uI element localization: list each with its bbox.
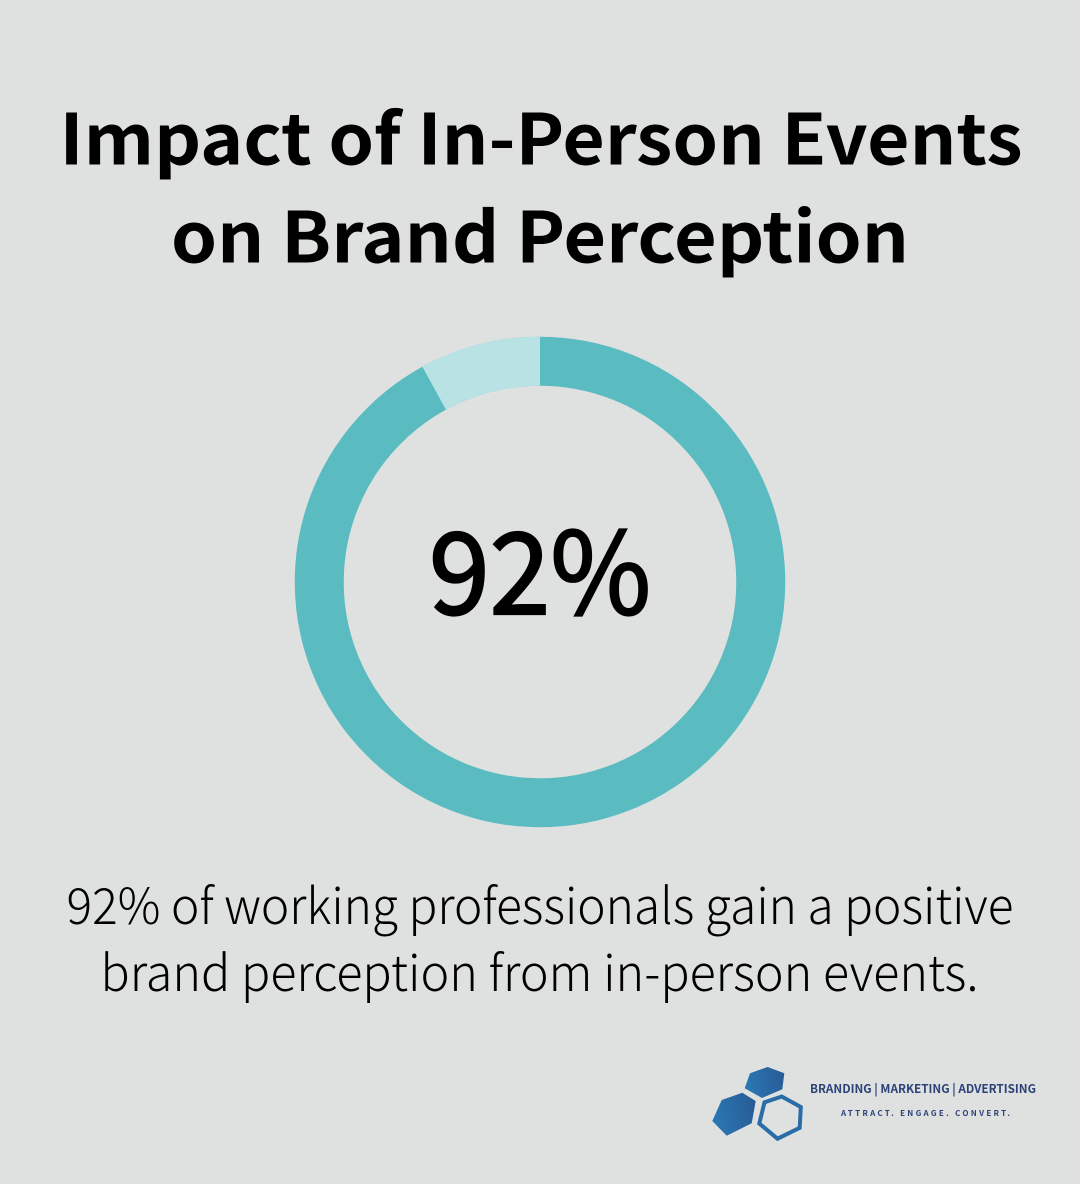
donut value: 92% xyxy=(429,483,651,647)
description xyxy=(66,867,1014,1006)
description: brand perception from in-person events. xyxy=(100,934,978,1006)
title: Impact of In-Person Events xyxy=(60,84,1022,186)
title xyxy=(60,84,1022,284)
logo tagline: ATTRACT. ENGAGE. CONVERT. xyxy=(840,1108,1010,1119)
logo xyxy=(712,1067,1036,1139)
icon: hexagons xyxy=(712,1067,801,1139)
description: 92% of working professionals gain a positive xyxy=(66,867,1014,939)
donut chart: 92% xyxy=(319,361,761,803)
title: on Brand Perception xyxy=(171,182,909,284)
logo text: BRANDING | MARKETING | ADVERTISING xyxy=(810,1080,1036,1097)
